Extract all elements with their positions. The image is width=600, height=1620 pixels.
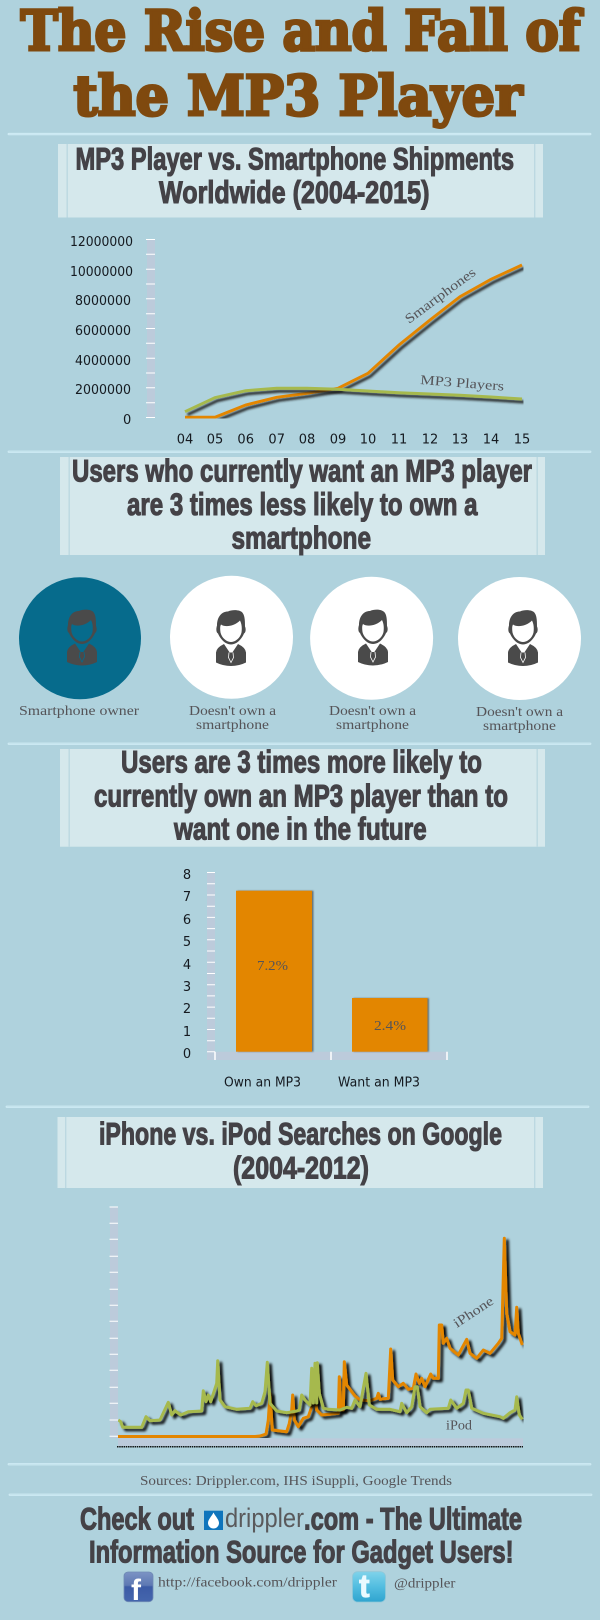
x axis labels: 15 xyxy=(514,432,530,448)
x axis labels xyxy=(177,432,530,448)
panel: own vs want heading xyxy=(60,743,545,847)
x axis xyxy=(215,1052,448,1091)
bar: want an MP3 2.4%: 2.4% xyxy=(374,1018,406,1033)
line: iPod xyxy=(118,1361,522,1427)
caption: Doesn't own a xyxy=(476,704,563,719)
icon: person xyxy=(67,610,97,666)
y axis: 2000000 xyxy=(75,383,131,398)
icon: facebook xyxy=(124,1572,153,1607)
pictogram: smartphone owner xyxy=(19,577,141,718)
x axis labels: 07 xyxy=(268,432,285,448)
x axis labels: 04 xyxy=(177,432,193,448)
y axis: 2 xyxy=(183,1002,191,1017)
y axis xyxy=(70,235,155,428)
panel: want an MP3 heading xyxy=(60,453,545,555)
x axis: Own an MP3 xyxy=(224,1076,301,1091)
line: MP3 players xyxy=(185,388,522,412)
icon: person xyxy=(216,610,246,666)
facebook link: http://facebook.com/drippler xyxy=(158,1575,338,1590)
icon: twitter: t xyxy=(359,1568,370,1604)
caption xyxy=(329,703,416,732)
bar chart: own vs want xyxy=(183,868,448,1091)
panel: want an MP3 heading: are 3 times less likely to own a xyxy=(127,486,478,522)
icon: drippler logo xyxy=(204,1511,223,1530)
panel: own vs want heading: Users are 3 times more likely to xyxy=(121,743,482,779)
x axis labels: 06 xyxy=(237,432,254,448)
y axis: 0 xyxy=(123,413,131,428)
x axis xyxy=(117,1438,523,1447)
panel: searches heading: (2004-2012) xyxy=(233,1149,369,1185)
y axis: 4 xyxy=(183,958,191,973)
y axis xyxy=(183,868,215,1062)
panel: shipments heading: Worldwide (2004-2015) xyxy=(159,174,430,210)
y axis: 5 xyxy=(183,935,191,950)
caption: smartphone xyxy=(336,717,409,732)
call to action xyxy=(80,1500,522,1569)
y axis: 7 xyxy=(183,890,191,905)
label: iPhone: iPhone xyxy=(450,1293,496,1331)
label: MP3 Players: MP3 Players xyxy=(420,372,505,394)
y axis: 3 xyxy=(183,980,191,995)
icon: person xyxy=(358,610,388,666)
call to action: Check out xyxy=(80,1500,194,1536)
pictogram: non-owner 3 xyxy=(458,577,581,733)
x axis labels: 14 xyxy=(483,432,499,448)
bar: want an MP3 2.4% xyxy=(352,998,428,1052)
x axis labels: 12 xyxy=(422,432,438,448)
x axis labels: 05 xyxy=(207,432,223,448)
twitter handle: @drippler xyxy=(394,1576,456,1591)
y axis: 1 xyxy=(183,1025,191,1040)
line chart: shipments xyxy=(70,235,530,448)
sources: Sources: Drippler.com, IHS iSuppli, Google Trends xyxy=(140,1473,452,1488)
title: the MP3 Player xyxy=(74,63,523,128)
y axis: 10000000 xyxy=(70,265,133,280)
line: smartphones xyxy=(185,265,522,417)
y axis: 8 xyxy=(183,868,191,883)
line: iPhone xyxy=(118,1238,522,1436)
caption: smartphone xyxy=(483,718,556,733)
y axis: 8000000 xyxy=(75,294,131,309)
y axis: 0 xyxy=(183,1047,191,1062)
line chart: searches xyxy=(110,1207,523,1447)
caption: Doesn't own a xyxy=(329,703,416,718)
y axis xyxy=(110,1207,118,1438)
panel: shipments heading xyxy=(58,140,543,218)
caption xyxy=(189,703,276,732)
caption: Doesn't own a xyxy=(189,703,276,718)
pictogram: non-owner 2 xyxy=(310,577,433,732)
x axis labels: 11 xyxy=(391,432,407,448)
caption xyxy=(476,704,563,733)
title xyxy=(20,0,584,128)
y axis: 4000000 xyxy=(75,354,131,369)
icon: twitter xyxy=(352,1568,386,1604)
x axis: Want an MP3 xyxy=(338,1076,420,1091)
y axis: 12000000 xyxy=(70,235,133,250)
panel: searches heading xyxy=(58,1115,543,1188)
caption: Smartphone owner xyxy=(19,703,140,718)
label: iPod: iPod xyxy=(446,1417,472,1432)
panel: want an MP3 heading: smartphone xyxy=(232,519,371,555)
icon: person xyxy=(508,610,538,666)
icon: facebook: f xyxy=(131,1574,142,1607)
y axis: 6000000 xyxy=(75,324,131,339)
x axis labels: 08 xyxy=(299,432,315,448)
caption: smartphone xyxy=(196,717,269,732)
logo wordmark: drippler xyxy=(225,1503,304,1533)
call to action: .com - The Ultimate xyxy=(304,1500,522,1536)
bar: own an MP3 7.2% xyxy=(236,891,312,1052)
x axis labels: 10 xyxy=(360,432,376,448)
label: Smartphones: Smartphones xyxy=(402,264,478,326)
x axis labels: 09 xyxy=(330,432,346,448)
panel: own vs want heading: want one in the future xyxy=(173,810,427,846)
y axis: 6 xyxy=(183,913,191,928)
x axis labels: 13 xyxy=(452,432,468,448)
bar: own an MP3 7.2%: 7.2% xyxy=(257,958,288,973)
pictogram: non-owner 1 xyxy=(170,576,293,732)
